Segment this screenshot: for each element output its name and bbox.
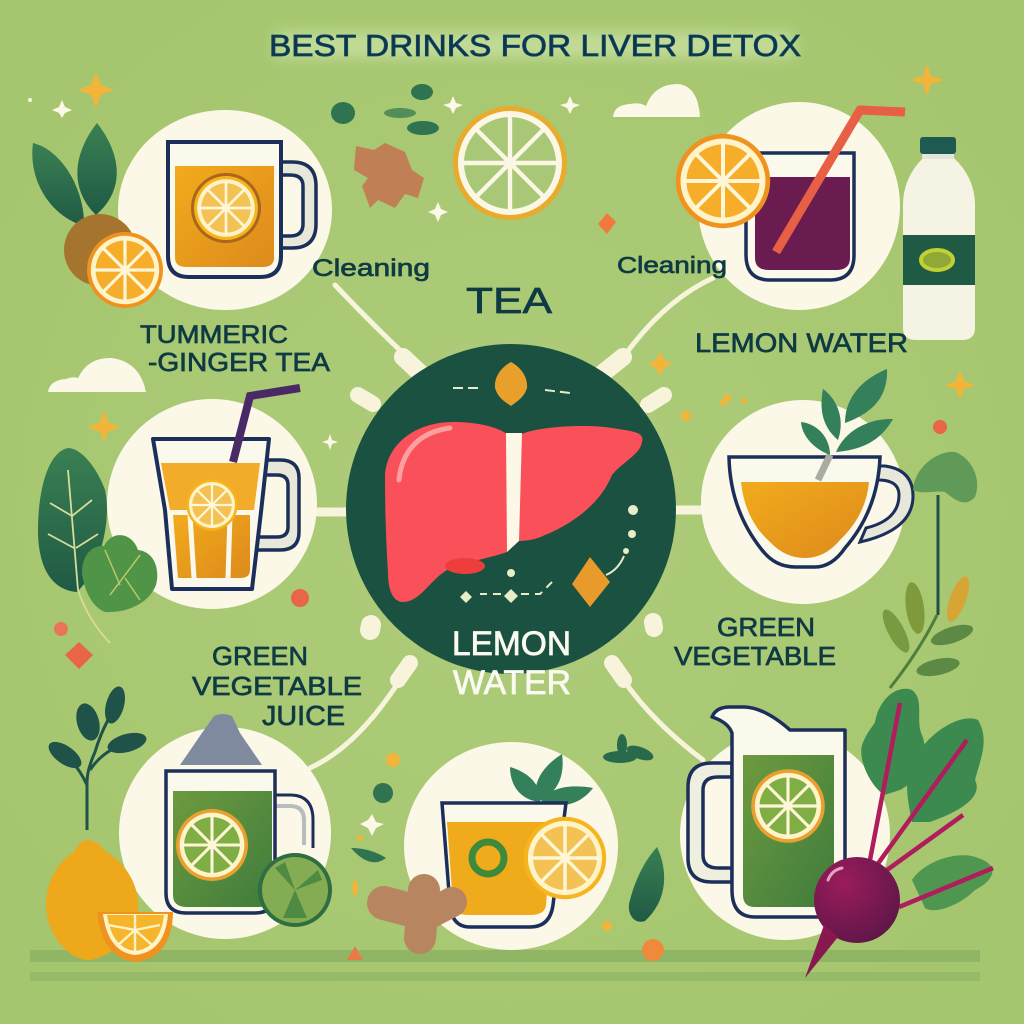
icon: liver bbox=[385, 422, 642, 602]
decorative dots and sparkles bbox=[28, 96, 947, 961]
label: green vegetable juice: VEGETABLE bbox=[192, 671, 362, 701]
icon: cloud left bbox=[48, 358, 146, 392]
label: green vegetable right: VEGETABLE bbox=[674, 641, 836, 671]
icon: cloud top right bbox=[613, 84, 700, 117]
icon: green juice jar bbox=[166, 714, 313, 913]
icon: lemon slice top centre bbox=[453, 106, 567, 220]
icon: top sprig bbox=[331, 84, 439, 135]
dotted path top bbox=[453, 388, 570, 393]
label: green vegetable right bbox=[674, 612, 836, 671]
label: turmeric ginger tea: TUMMERIC bbox=[140, 321, 288, 349]
label: turmeric ginger tea bbox=[140, 321, 331, 377]
liver divider bbox=[506, 433, 522, 552]
liver highlight bbox=[399, 428, 450, 480]
label: green vegetable juice: JUICE bbox=[262, 700, 345, 731]
connector lines bbox=[310, 278, 713, 768]
icon: beetroot and greens bbox=[805, 689, 993, 978]
label: green vegetable right: GREEN bbox=[717, 612, 815, 642]
icon: ginger root bbox=[384, 890, 452, 938]
icon: lemon tea glass bbox=[442, 803, 606, 927]
title: BEST DRINKS FOR LIVER DETOX bbox=[269, 28, 801, 63]
label: lemon water centre bbox=[452, 625, 571, 702]
icon: ginger chunk bbox=[354, 143, 424, 208]
icon: dark sprig bbox=[44, 684, 149, 830]
panel: turmeric-ginger tea bbox=[32, 110, 332, 310]
icon: lime bbox=[258, 853, 332, 927]
liver gallbladder bbox=[445, 558, 485, 574]
label: cleaning left: Cleaning bbox=[312, 255, 430, 282]
icon: citrus glass with straw bbox=[153, 388, 300, 589]
icon: lemon and wedge bbox=[46, 840, 173, 962]
dotted path lower bbox=[460, 505, 638, 603]
label: green vegetable juice bbox=[192, 641, 362, 731]
icon: big leaf and greens bbox=[38, 448, 157, 643]
icon: plant right bbox=[878, 452, 977, 688]
label: lemon water centre: LEMON bbox=[452, 625, 571, 663]
label: lemon water: LEMON WATER bbox=[695, 328, 908, 358]
icon: leaves bbox=[510, 754, 593, 805]
icon: leaves and fruit bbox=[32, 123, 163, 308]
panel: bottom centre lemon tea bbox=[404, 742, 618, 950]
panel: mid left citrus drink bbox=[38, 388, 317, 643]
decorative sparkles gold bbox=[78, 64, 975, 931]
label: green vegetable juice: GREEN bbox=[212, 641, 308, 671]
panel: lemon water purple drink bbox=[676, 102, 975, 340]
icon: small orange leaf bbox=[572, 557, 610, 607]
icon: small lemon bbox=[495, 362, 527, 406]
panel: bottom right pitcher bbox=[680, 689, 993, 978]
panel: bottom left green juice bbox=[44, 684, 332, 962]
icon: turmeric tea mug bbox=[168, 142, 316, 277]
icon: sprig above bottom centre bbox=[603, 734, 655, 763]
icon: tea cup bbox=[729, 455, 913, 567]
panel: mid right green tea cup bbox=[701, 369, 977, 688]
label: cleaning right: Cleaning bbox=[617, 252, 727, 278]
icon: purple drink glass bbox=[676, 110, 905, 280]
icon: leaf right bbox=[629, 847, 664, 922]
label: turmeric ginger tea: -GINGER TEA bbox=[148, 347, 331, 377]
label: lemon water centre: WATER bbox=[453, 664, 571, 702]
label: tea: TEA bbox=[466, 280, 552, 321]
ground bands bbox=[30, 950, 980, 981]
icon: pitcher bbox=[688, 707, 845, 917]
icon: water bottle bbox=[903, 137, 975, 340]
icon: leaf sprig bbox=[801, 369, 893, 455]
panel: central liver circle bbox=[346, 344, 676, 702]
